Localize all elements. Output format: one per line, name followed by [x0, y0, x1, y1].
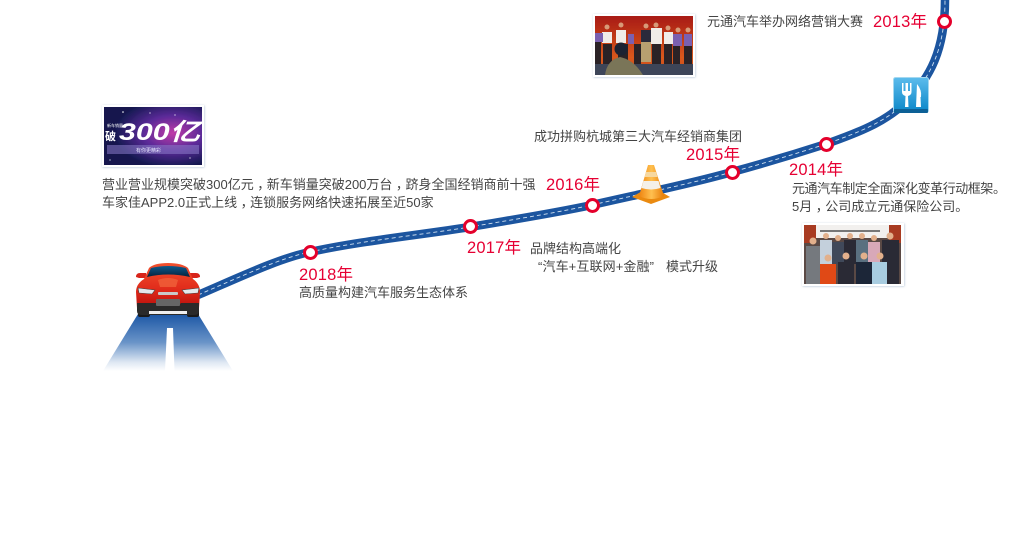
text: 2017 description: “汽车+互联网+金融” [538, 259, 654, 274]
text: 2015 description: 成功拼购杭城第三大汽车经销商集团 [534, 129, 742, 144]
text: 2014 description [792, 181, 1006, 214]
icon: red car [136, 263, 200, 317]
year: 2018: 2018年 [299, 265, 353, 284]
image: 2013 award photo [593, 14, 695, 77]
text: 2017 description: 品牌结构高端化 [530, 241, 621, 256]
road under car [103, 314, 233, 371]
road route [198, 0, 945, 295]
image: 300亿 banner: 300亿 [119, 119, 204, 146]
icon: restaurant sign [894, 78, 928, 113]
text: 2017 description: 模式升级 [666, 259, 718, 274]
year: 2016: 2016年 [546, 175, 600, 194]
text: 2016 description [102, 177, 535, 210]
text: 2018 description: 高质量构建汽车服务生态体系 [299, 285, 468, 300]
text: 2014 description: 元通汽车制定全面深化变革行动框架。 [792, 181, 1006, 196]
image: 300亿 banner: 破 [105, 129, 116, 143]
image: 300亿 banner: 新车销量 [107, 122, 123, 128]
icon: traffic cone [632, 165, 670, 204]
text: 2016 description: 营业营业规模突破300亿元 ，新车销量突破200万台 ，跻身全国经销商前十强 [102, 177, 535, 192]
text: 2013 description: 元通汽车举办网络营销大赛 [707, 14, 863, 29]
image: 300亿 banner [102, 105, 204, 167]
timeline markers [304, 16, 950, 258]
year: 2014: 2014年 [789, 160, 843, 179]
text: 2017 description [530, 241, 718, 274]
text: 2016 description: 车家佳APP2.0正式上线 ，连锁服务网络快速拓展至近50家 [102, 195, 434, 210]
image: 2014 group photo [802, 223, 904, 286]
year: 2017: 2017年 [467, 238, 521, 257]
year: 2013: 2013年 [873, 12, 927, 31]
year: 2015: 2015年 [686, 145, 740, 164]
image: 300亿 banner: 有你更精彩 [136, 147, 161, 154]
text: 2014 description: 5月 ，公司成立元通保险公司。 [792, 199, 968, 214]
